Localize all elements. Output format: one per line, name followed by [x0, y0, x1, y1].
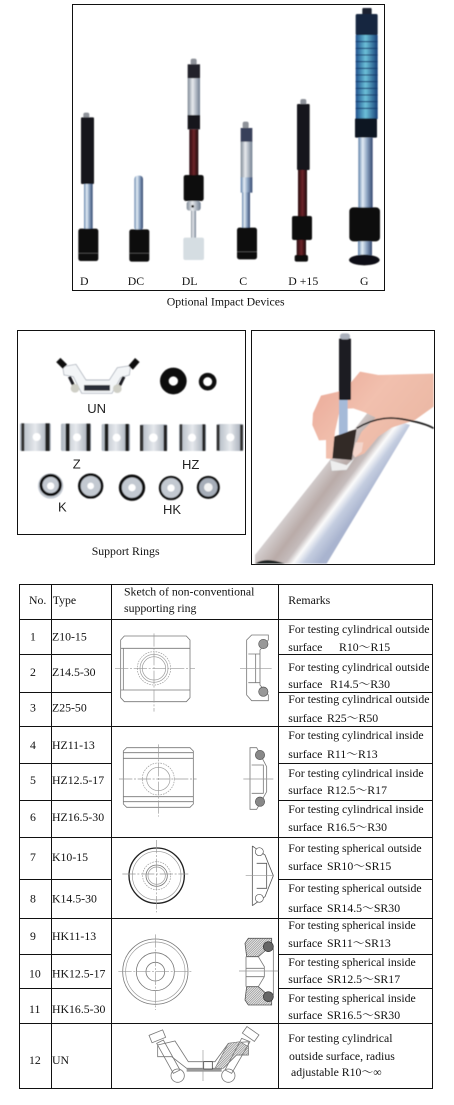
column: remarks: For testing cylindrical inside: [288, 802, 424, 816]
table header: Type: [53, 593, 76, 607]
column: remarks: SR14.5～SR30: [327, 901, 400, 915]
device labels: D +15: [288, 274, 318, 288]
Z and HZ plates: [20, 423, 243, 451]
photo frame: [252, 330, 434, 564]
column: remarks: For testing cylindrical inside: [288, 766, 424, 780]
device DC: [129, 176, 149, 262]
device C: [237, 122, 257, 259]
steel tube: [255, 411, 410, 564]
column: ring types: HZ12.5-17: [52, 773, 104, 787]
tube end: [255, 560, 285, 564]
column: row numbers: 8: [30, 892, 36, 906]
ring labels: HZ: [182, 457, 199, 472]
black rubber rings: [164, 372, 214, 390]
device shaft: [339, 400, 348, 440]
column: remarks: R11～R13: [327, 747, 378, 761]
caption: support rings: Support Rings: [92, 544, 160, 558]
column: row numbers: 10: [29, 967, 41, 981]
column: remarks: surface: [288, 1008, 322, 1022]
device foot: [332, 429, 357, 460]
column: remarks: R16.5～R30: [327, 820, 387, 834]
column: remarks: R10～R15: [339, 640, 390, 654]
column: remarks: R14.5～R30: [330, 677, 390, 691]
device labels: D: [80, 274, 89, 288]
ring labels: HK: [163, 502, 181, 517]
frame: impact devices: [72, 4, 384, 290]
column: ring types: Z10-15: [52, 630, 87, 644]
column: ring types: HK11-13: [52, 929, 96, 943]
device D: [78, 113, 98, 261]
column: remarks: surface: [288, 972, 322, 986]
column: row numbers: 3: [30, 701, 36, 715]
frame: support rings: [18, 330, 246, 534]
column: row numbers: 5: [30, 773, 36, 787]
device labels: C: [239, 274, 247, 288]
column: ring types: K14.5-30: [52, 892, 97, 906]
column: remarks: For testing spherical inside: [288, 918, 416, 932]
table header: supporting ring: [124, 601, 197, 615]
table header: Remarks: [288, 593, 331, 607]
column: remarks: For testing spherical inside: [288, 991, 416, 1005]
support ring: [330, 457, 355, 471]
cable: [357, 418, 434, 428]
device G: [349, 8, 380, 265]
impact device body: [339, 338, 351, 400]
column: row numbers: 2: [30, 665, 36, 679]
ring labels: UN: [87, 401, 106, 416]
device DL: [183, 59, 204, 260]
caption: optional impact devices: Optional Impact Devices: [167, 294, 285, 308]
photo: support ring parts: [20, 360, 243, 500]
column: remarks: For testing cylindrical: [288, 1031, 393, 1045]
sketch: HK ring: [118, 934, 278, 1010]
column: remarks: surface: [288, 711, 322, 725]
thumb nail: [352, 442, 363, 457]
column: remarks: R12.5～R17: [327, 783, 387, 797]
device labels: G: [360, 274, 369, 288]
column: row numbers: 7: [30, 850, 36, 864]
column: ring types: UN: [52, 1053, 70, 1067]
column: remarks: For testing spherical inside: [288, 955, 416, 969]
table header: Sketch of non-conventional: [124, 585, 255, 599]
column: remarks: For testing cylindrical outside: [288, 622, 430, 636]
column: remarks: For testing cylindrical outside: [288, 692, 430, 706]
column: remarks: surface: [288, 783, 322, 797]
column: row numbers: 6: [30, 810, 36, 824]
K and HK rings: [38, 473, 220, 500]
column: remarks: SR12.5～SR17: [327, 972, 400, 986]
column: ring types: Z25-50: [52, 701, 87, 715]
hand: [312, 372, 434, 459]
table grid: [20, 584, 432, 1088]
column: remarks: adjustable R10～∞: [291, 1065, 382, 1079]
column: ring types: Z14.5-30: [52, 665, 96, 679]
column: ring types: HZ16.5-30: [52, 810, 104, 824]
column: remarks: surface: [288, 820, 322, 834]
table header: No.: [29, 593, 46, 607]
sketch: UN ring: [149, 1027, 259, 1082]
column: ring types: K10-15: [52, 850, 88, 864]
column: remarks: R25～R50: [327, 711, 378, 725]
column: remarks: For testing spherical outside: [288, 841, 422, 855]
column: row numbers: 9: [30, 929, 36, 943]
device cap: [340, 333, 350, 339]
column: remarks: surface: [288, 936, 322, 950]
sketch: Z ring: [115, 633, 272, 712]
column: ring types: HK16.5-30: [52, 1002, 106, 1016]
panel: photo of device testing a tube: [252, 330, 434, 564]
UN ring bracket: [58, 360, 137, 393]
column: remarks: surface: [288, 677, 322, 691]
column: remarks: For testing cylindrical outside: [288, 660, 430, 674]
device D+15: [292, 99, 312, 262]
sketch: K ring: [122, 840, 273, 912]
column: ring types: [52, 630, 106, 1067]
photo: hand testing a steel tube: [255, 333, 434, 564]
column: row numbers: 1: [30, 630, 36, 644]
column: remarks: surface: [288, 640, 322, 654]
photo: six impact devices: [78, 8, 380, 265]
column: ring types: HZ11-13: [52, 738, 95, 752]
column: remarks: SR10～SR15: [327, 859, 391, 873]
column: remarks: For testing spherical outside: [288, 881, 422, 895]
column: remarks: SR16.5～SR30: [327, 1008, 400, 1022]
device labels: DL: [182, 274, 197, 288]
table header: [29, 585, 331, 615]
column: remarks: For testing cylindrical inside: [288, 728, 424, 742]
ring labels: [58, 401, 199, 517]
panel: support rings: [18, 330, 246, 534]
column: row numbers: 4: [30, 738, 36, 752]
device labels: DC: [128, 274, 144, 288]
column: ring types: HK12.5-17: [52, 967, 106, 981]
column: row numbers: 11: [29, 1002, 40, 1016]
column: row numbers: [29, 630, 41, 1067]
column: remarks: surface: [288, 747, 322, 761]
column: remarks: surface: [288, 901, 322, 915]
device labels: [80, 274, 369, 288]
column: row numbers: 12: [29, 1053, 41, 1067]
column: remarks: SR11～SR13: [327, 936, 391, 950]
column: remarks: outside surface, radius: [289, 1049, 395, 1063]
table: non-conventional supporting rings: [20, 584, 432, 1088]
ring labels: K: [58, 500, 67, 515]
panel: optional impact devices: [72, 4, 384, 290]
column: remarks: surface: [288, 859, 322, 873]
column: remarks: [288, 622, 430, 1079]
ring labels: Z: [73, 457, 81, 472]
sketch: HZ ring: [119, 744, 273, 817]
